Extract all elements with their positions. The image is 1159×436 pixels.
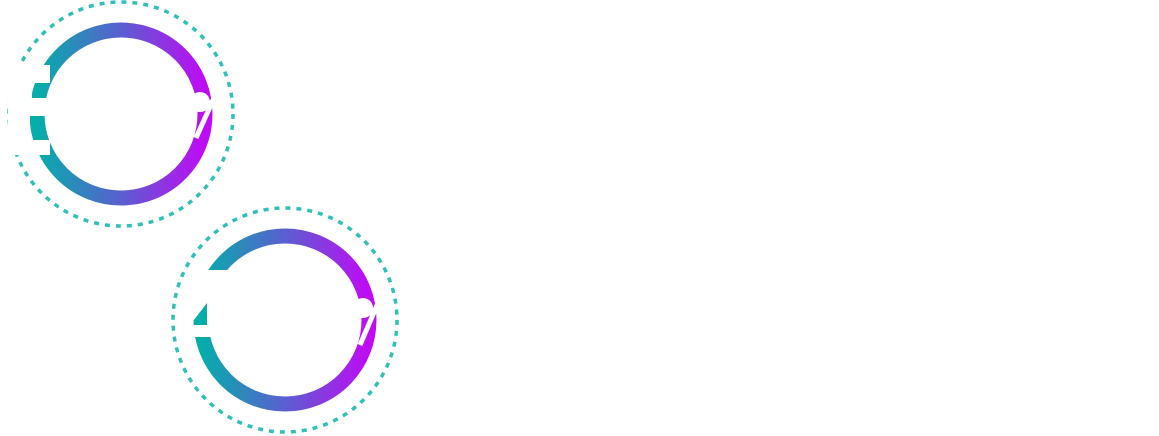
- ring 1: [8, 2, 233, 226]
- ring 2: [173, 208, 397, 432]
